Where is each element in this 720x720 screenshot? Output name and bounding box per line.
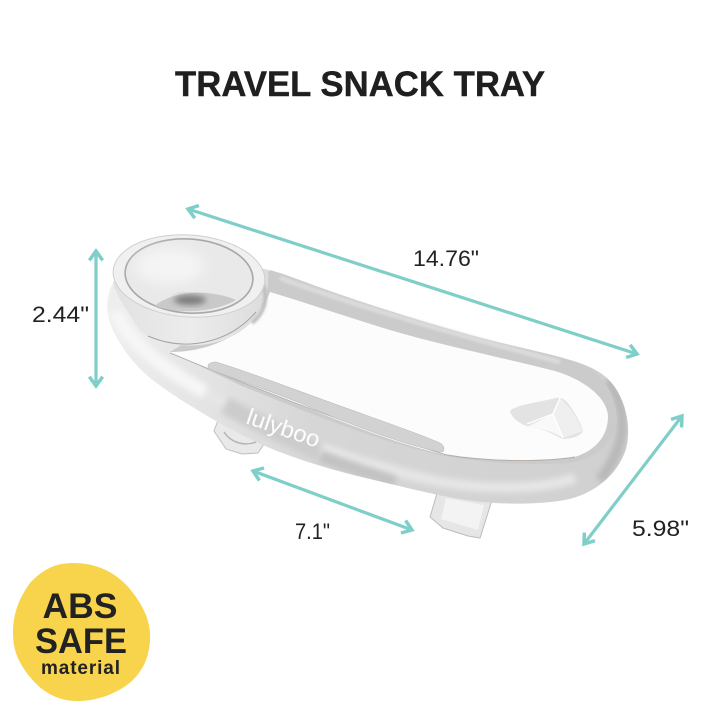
tray inner wall: [170, 270, 617, 464]
tray product illustration: [107, 230, 628, 538]
arrow: length dimension: [188, 209, 637, 354]
arrow: width dimension: [584, 416, 682, 544]
body shading group: [116, 312, 622, 488]
cup bottom shadow: [155, 293, 236, 311]
floor edge line: [170, 353, 575, 461]
title: TRAVEL SNACK TRAY: [175, 65, 545, 104]
badge: ABS safe material: [13, 563, 150, 701]
badge text: SAFE: SAFE: [35, 622, 127, 661]
arrow: base width dimension: [253, 471, 412, 530]
label: width: 5.98": [632, 516, 689, 541]
arrow: height dimension: [94, 251, 98, 386]
cup outer wall: [113, 240, 268, 346]
tray outer body: [107, 250, 628, 504]
cup rim: [110, 230, 268, 322]
body highlight: left rim: [116, 312, 205, 392]
body shading: under logo: [320, 456, 395, 482]
body shading: logo area: [225, 405, 320, 452]
tray foot: left: [214, 415, 264, 454]
cup opening highlight: [135, 248, 205, 284]
tray foot: right: [430, 490, 492, 538]
badge text: material: material: [41, 658, 120, 679]
logo: lulyboo: lulyboo: [243, 403, 324, 452]
badge blob: [13, 563, 150, 701]
body shading: right end: [600, 380, 622, 480]
cup holder: [110, 230, 268, 346]
tray floor: [170, 292, 608, 461]
label: base width: 7.1": [295, 519, 330, 544]
floor slot ridge: [208, 362, 444, 452]
label: height: 2.44": [32, 302, 89, 327]
cup opening: [123, 235, 255, 317]
corner cup holder notch: [510, 398, 583, 439]
badge text: ABS: ABS: [42, 587, 118, 626]
wall highlight: top rail: [280, 278, 560, 362]
label: length: 14.76": [413, 246, 479, 271]
body highlight: lower rim line: [322, 444, 576, 494]
